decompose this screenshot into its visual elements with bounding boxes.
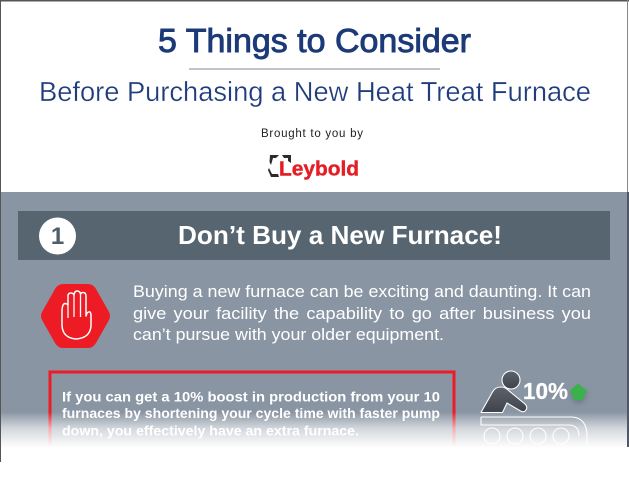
intro paragraph: give your facility the capability to go after business you [133,304,591,323]
icon: Leybold bracket mark [268,155,291,177]
number badge: 1 [51,223,64,250]
callout: production boost: down, you effectively have an extra furnace. [62,422,359,438]
icon: worker at conveyor with 10% increase [481,371,588,450]
wordmark: Leybold [279,158,359,180]
icon: green up arrow [569,384,588,403]
conveyor belt [481,417,587,450]
sponsor text: Brought to you by [261,128,363,140]
title: 5 Things to Consider [158,22,471,59]
icon: worker [481,371,527,412]
callout: production boost [50,372,454,462]
logo: Leybold [268,155,359,180]
intro paragraph [133,282,591,344]
intro paragraph: can’t pursue with your older equipment. [133,325,444,344]
panel: white header background [0,0,629,192]
section heading: Don’t Buy a New Furnace! [178,220,502,250]
intro paragraph: Buying a new furnace can be exciting and daunting. It can [133,282,591,301]
section header bar [18,211,610,260]
panel: section 1 background [0,192,629,452]
number badge [39,218,76,254]
callout: production boost: If you can get a 10% boost in production from your 10 [62,388,440,404]
bottom white fade [0,412,629,448]
increase label: 10% [523,378,568,404]
icon: stop hand hexagon [41,284,110,348]
subtitle: Before Purchasing a New Heat Treat Furnace [39,76,591,107]
callout: production boost: furnaces by shortening your cycle time with faster pump [62,405,440,421]
